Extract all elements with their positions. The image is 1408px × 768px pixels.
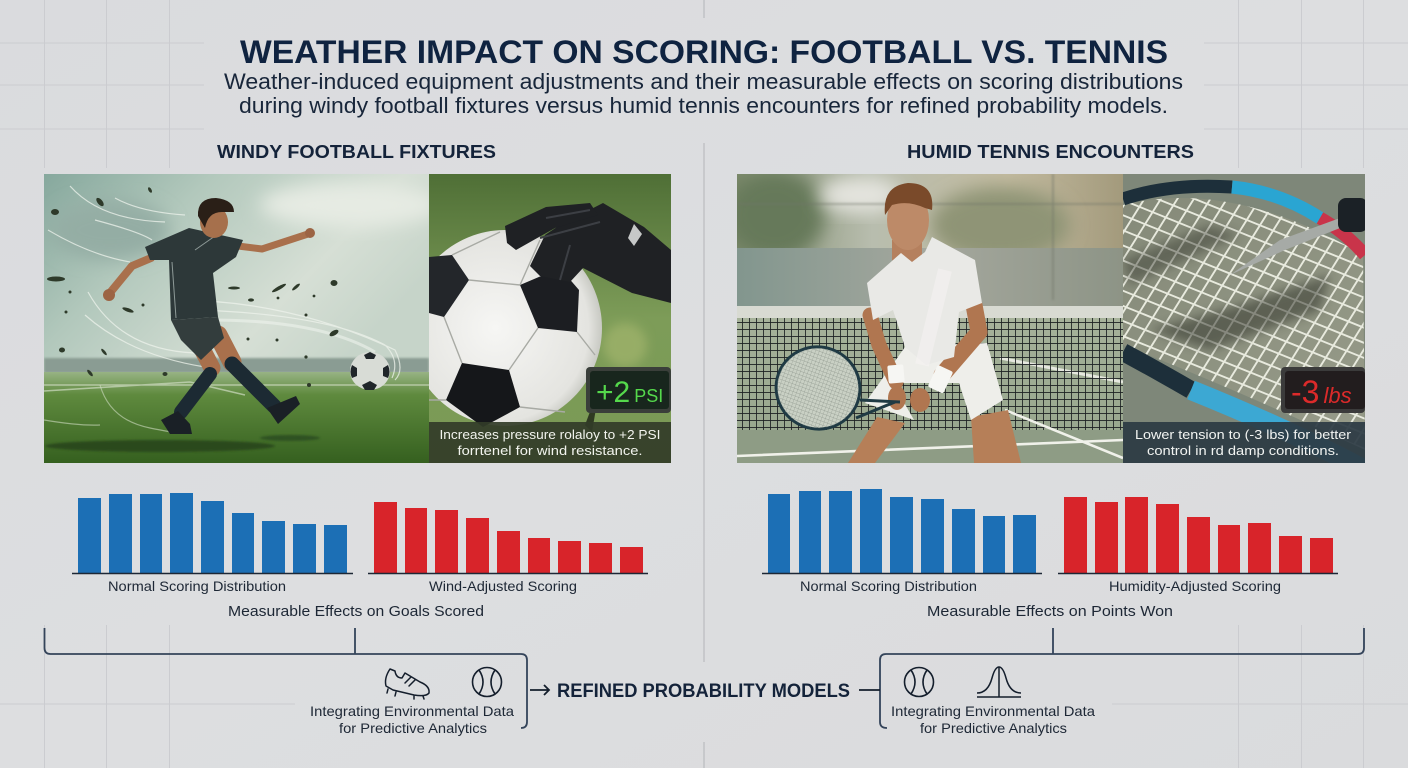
subtitle: during windy football fixtures versus humid tennis encounters for refined probability models. [239, 93, 1168, 118]
title: WEATHER IMPACT ON SCORING: FOOTBALL VS. TENNIS [240, 34, 1168, 70]
heading: windy football fixtures: WINDY FOOTBALL FIXTURES [217, 142, 496, 162]
pressure readout +2 PSI [586, 367, 671, 413]
caption: football: forrtenel for wind resistance. [458, 443, 642, 458]
pressure readout +2 PSI: +2PSI [596, 376, 663, 409]
tension readout -3 lbs [1281, 367, 1365, 413]
label: measurable effects on points: Measurable Effects on Points Won [927, 603, 1173, 620]
chart: humidity-adjusted scoring [1058, 497, 1338, 594]
text: integrating data right: for Predictive Analytics [920, 720, 1067, 736]
text: integrating data right [891, 703, 1095, 736]
chart: tennis normal scoring distribution: Normal Scoring Distribution [800, 578, 977, 594]
wind streaks [48, 186, 400, 380]
glove [505, 203, 671, 303]
heading: humid tennis encounters: HUMID TENNIS ENCOUNTERS [907, 142, 1194, 162]
subtitle [224, 69, 1183, 118]
caption: football: Increases pressure rolaloy to +2 PSI [440, 427, 660, 442]
caption: tennis: control in rd damp conditions. [1147, 443, 1339, 458]
icon: football boot [386, 669, 429, 699]
bracket: tennis [880, 628, 1364, 728]
chart: tennis normal scoring distribution [762, 489, 1042, 594]
racket frame [1123, 180, 1365, 422]
icon: bell curve [977, 667, 1021, 697]
racket strings [1123, 198, 1365, 422]
football close-up [429, 230, 602, 426]
tennis player [848, 183, 1021, 463]
footballer [103, 198, 315, 434]
photo: footballer kicking in wind [44, 174, 440, 463]
bracket: football [44, 628, 527, 728]
text: integrating data right: Integrating Environmental Data [891, 703, 1095, 719]
label: measurable effects on goals: Measurable Effects on Goals Scored [228, 603, 484, 620]
subtitle: Weather-induced equipment adjustments and their measurable effects on scoring distributions [224, 69, 1183, 94]
connector: right [859, 689, 880, 691]
stringing pliers [1230, 198, 1368, 275]
caption: tennis [1123, 422, 1365, 463]
chart: football normal scoring distribution: Normal Scoring Distribution [108, 578, 286, 594]
photo: racket strings close-up with tension readout [1123, 174, 1365, 463]
text: integrating data left: for Predictive Analytics [339, 720, 487, 736]
text: integrating data left: Integrating Environmental Data [310, 703, 514, 719]
arrow to refined probability models [530, 685, 549, 695]
caption: football [429, 422, 671, 463]
photo: gloved hand on football with pressure readout [408, 174, 671, 463]
text: integrating data left [310, 703, 514, 736]
icon: ball left [472, 668, 502, 696]
photo: tennis player in humid conditions [725, 170, 1123, 463]
caption: tennis: Lower tension to (-3 lbs) for better [1135, 427, 1352, 442]
chart: wind-adjusted scoring: Wind-Adjusted Scoring [429, 578, 577, 594]
icon: ball right [904, 668, 934, 696]
football in flight [350, 352, 390, 390]
chart: humidity-adjusted scoring: Humidity-Adjusted Scoring [1109, 578, 1281, 594]
tension readout -3 lbs: -3lbs [1291, 374, 1352, 410]
chart: football normal scoring distribution [72, 493, 353, 594]
central label: REFINED PROBABILITY MODELS [557, 681, 850, 702]
chart: wind-adjusted scoring [368, 502, 648, 594]
player's racket [774, 345, 900, 431]
